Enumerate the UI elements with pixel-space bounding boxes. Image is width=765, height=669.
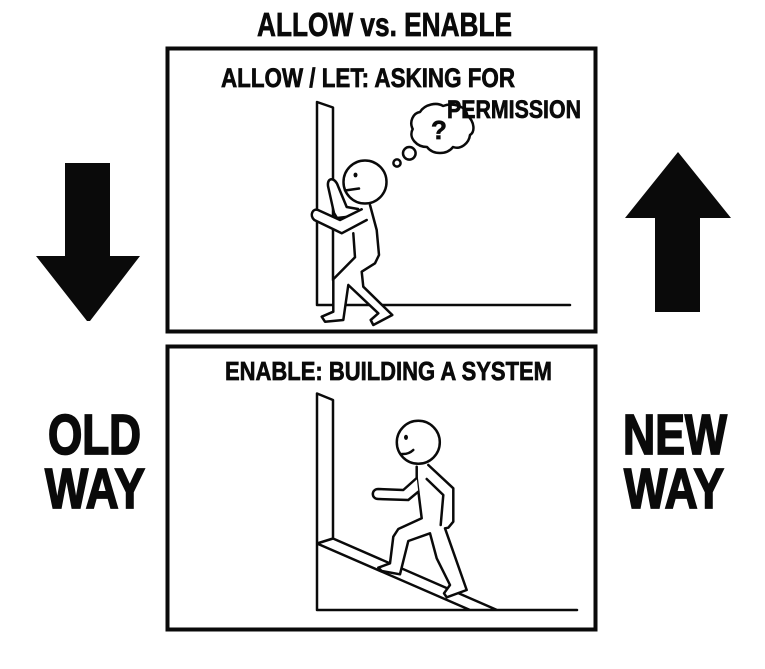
label: new way: NEW [623,403,727,467]
person: body and legs [322,205,392,325]
label: old way: OLD [48,403,141,467]
panel: enable [168,346,596,630]
person: raised arm [328,179,358,218]
illustration: person at door asking for permission [312,102,570,325]
person: reaching arm [312,209,367,233]
arrow: up [625,152,731,312]
wall, ramp and floor [317,394,577,610]
label: old way [45,403,145,521]
person: arm behind [427,479,443,525]
arrow: down [36,163,140,321]
panel heading line two: PERMISSION [447,96,581,124]
thought bubble: ? [431,115,447,145]
person: head and face [397,421,440,464]
label: new way: WAY [624,457,724,521]
panel: allow / let [168,48,596,332]
illustration: person walking up a ramp [317,394,577,610]
person: body and legs [378,465,467,597]
person: head and face [344,160,386,204]
title: ALLOW vs. ENABLE [257,6,512,43]
label: new way [623,403,727,521]
panel frame [168,346,596,630]
panel heading: ENABLE: BUILDING A SYSTEM [225,356,552,386]
person: arm forward [373,478,418,500]
thought bubble [393,104,473,167]
panel heading line one: ALLOW / LET: ASKING FOR [221,63,515,93]
panel frame [168,48,596,332]
door and floor [317,102,570,305]
label: old way: WAY [45,457,145,521]
